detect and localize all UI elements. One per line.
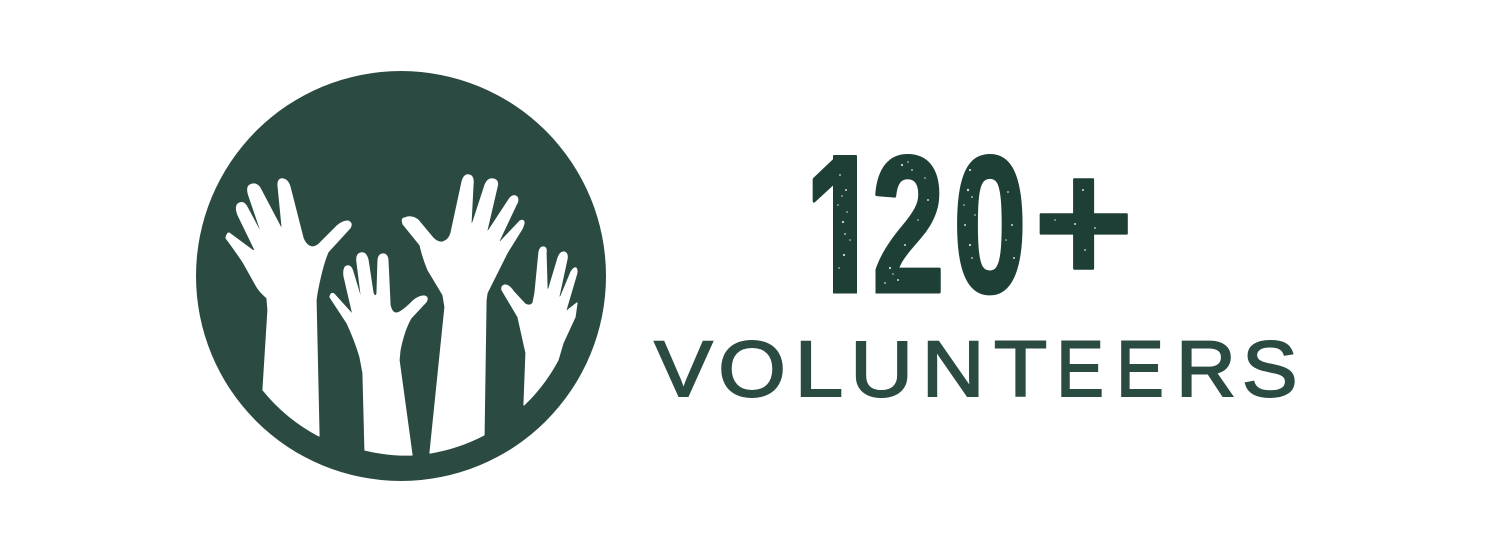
big number 120+ [805, 117, 1134, 334]
distressed speckle texture on the number [837, 161, 1096, 284]
large centre-right hand [402, 175, 524, 453]
right hand [502, 247, 577, 405]
number 120: 120 [805, 117, 1027, 334]
icon background circle [196, 71, 606, 481]
left large hand [226, 179, 351, 436]
label: VOLUNTEERS: EE [1056, 325, 1164, 413]
label: VOLUNTEERS [654, 325, 1297, 414]
label: VOLUNTEERS: VOLUNT [655, 325, 1047, 413]
label: VOLUNTEERS: RS [1176, 326, 1297, 414]
icon: raised hands in circle [196, 71, 606, 481]
small centre-left hand [330, 253, 427, 455]
plus sign: + [1034, 124, 1134, 320]
